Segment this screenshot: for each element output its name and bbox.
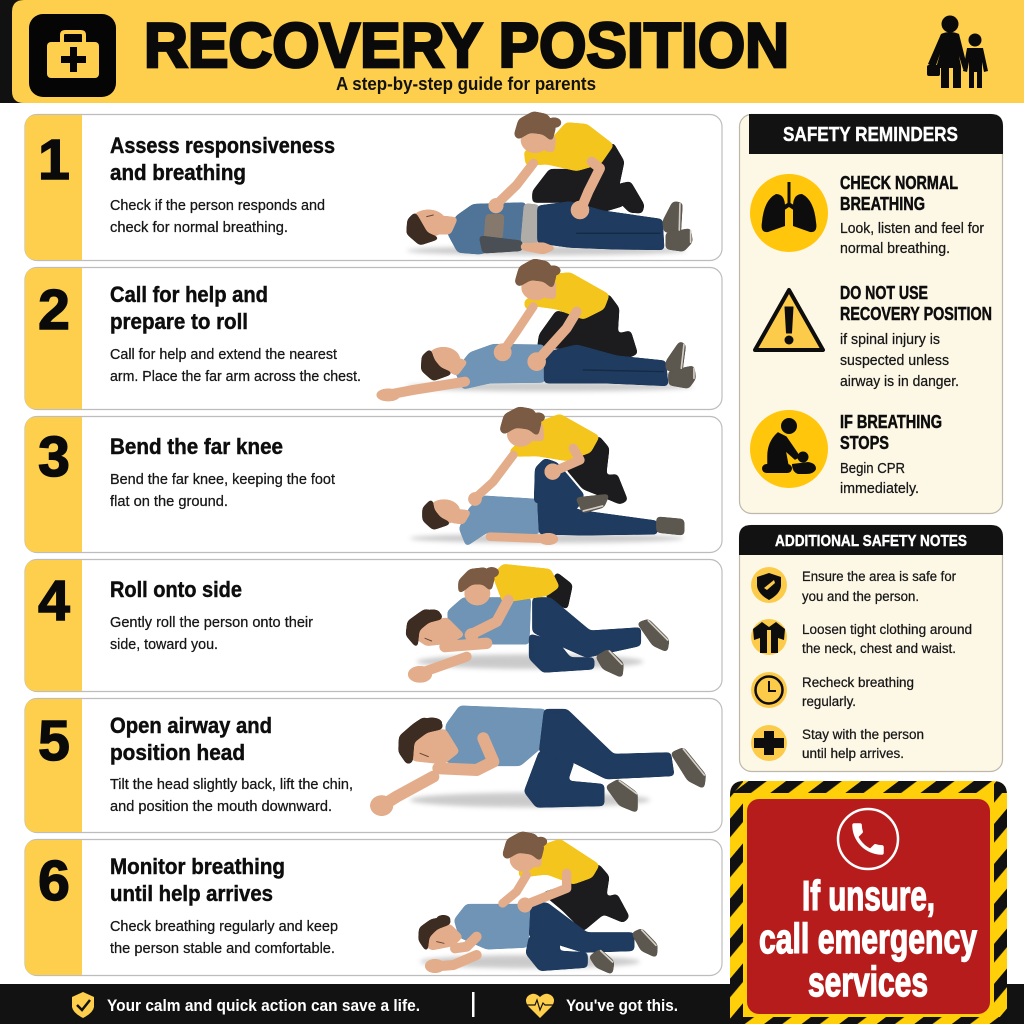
panel: step 3: Bend the far knee, keeping the foot <box>110 472 335 488</box>
text: check normal breathing: CHECK NORMAL <box>840 173 958 193</box>
panel: step 1 <box>25 112 722 260</box>
panel: step 2: Call for help and <box>110 282 268 307</box>
panel: step 1: check for normal breathing. <box>110 220 288 236</box>
panel: step 1: and breathing <box>110 160 246 185</box>
callout text <box>759 872 977 1005</box>
note: stay with person: Stay with the person <box>802 727 924 742</box>
illustration: monitoring breathing <box>419 832 657 973</box>
callout: call emergency services <box>730 781 1007 1024</box>
panel: step 5 <box>25 698 722 832</box>
note: area safe: Ensure the area is safe for <box>802 569 956 584</box>
subtitle: A step-by-step guide for parents <box>336 74 596 94</box>
icon: parent and child <box>927 16 988 88</box>
icon: CPR <box>750 410 828 488</box>
text: do not use recovery position: DO NOT USE <box>840 283 928 303</box>
panel: step 2: 2 <box>38 278 70 342</box>
heading: additional safety notes: ADDITIONAL SAFETY NOTES <box>775 533 967 550</box>
panel: step 2: arm. Place the far arm across the chest. <box>110 369 361 385</box>
note: recheck breathing: regularly. <box>802 694 856 709</box>
text: do not use recovery position: if spinal injury is <box>840 332 940 348</box>
heading: additional safety notes <box>739 525 1003 555</box>
icon: heart with pulse <box>526 994 554 1018</box>
heading: safety reminders: SAFETY REMINDERS <box>783 124 958 146</box>
illustration: helper checking person lying on back <box>407 112 692 255</box>
text: do not use recovery position <box>840 283 992 390</box>
text: check normal breathing: BREATHING <box>840 194 925 214</box>
panel: step 2: prepare to roll <box>110 309 248 334</box>
text: if breathing stops: Begin CPR <box>840 461 905 477</box>
note: area safe: you and the person. <box>802 589 919 604</box>
footer reassurance: You've got this. <box>566 996 678 1015</box>
footer message: Your calm and quick action can save a life. <box>107 996 420 1015</box>
note: recheck breathing: Recheck breathing <box>802 675 914 690</box>
panel: step 5: Open airway and <box>110 713 272 738</box>
panel: step 3: Bend the far knee <box>110 434 283 459</box>
panel: step 2 <box>25 260 722 410</box>
text: check normal breathing: Look, listen and feel for <box>840 221 984 237</box>
panel: step 1: 1 <box>38 128 70 192</box>
panel: step 1: Check if the person responds and <box>110 198 325 214</box>
panel: additional safety notes <box>739 525 1003 772</box>
icon: shield check <box>72 992 94 1018</box>
panel: safety reminders <box>740 114 1003 514</box>
panel: step 1: Assess responsiveness <box>110 133 335 158</box>
note: loosen clothing: Loosen tight clothing around <box>802 622 972 637</box>
icon: lungs <box>750 174 828 252</box>
panel: step 6: Check breathing regularly and keep <box>110 919 338 935</box>
note: stay with person: until help arrives. <box>802 746 904 761</box>
note: area safe <box>751 567 956 604</box>
panel: step 6: until help arrives <box>110 881 273 906</box>
illustration: bending far knee <box>410 408 683 545</box>
text: check normal breathing <box>840 173 984 257</box>
icon: warning triangle <box>755 290 823 350</box>
title: RECOVERY POSITION <box>144 11 789 81</box>
panel: step 6: 6 <box>38 849 70 913</box>
panel: step 6: Monitor breathing <box>110 854 285 879</box>
panel: step 3: 3 <box>38 425 70 489</box>
panel: step 3 <box>25 408 722 552</box>
panel: step 2: Call for help and extend the nearest <box>110 347 337 363</box>
callout text: If unsure, <box>802 872 935 919</box>
panel: step 4: Gently roll the person onto their <box>110 615 313 631</box>
text: do not use recovery position: suspected unless <box>840 353 949 369</box>
icon: phone <box>838 809 898 869</box>
panel: step 4: Roll onto side <box>110 577 242 602</box>
panel: step 6: the person stable and comfortable. <box>110 941 335 957</box>
footer bar <box>0 984 1024 1024</box>
icon: first aid kit <box>29 14 116 97</box>
header banner <box>0 0 1024 103</box>
panel: step 4: side, toward you. <box>110 637 218 653</box>
panel: step 4 <box>25 560 722 692</box>
text: if breathing stops <box>840 412 942 497</box>
panel: step 5: and position the mouth downward. <box>110 799 332 815</box>
illustration: person on side with airway open <box>371 707 705 815</box>
text: do not use recovery position: airway is in danger. <box>840 374 959 390</box>
panel: step 5: position head <box>110 740 245 765</box>
text: if breathing stops: STOPS <box>840 433 889 453</box>
note: recheck breathing <box>751 672 914 709</box>
panel: step 5: 5 <box>38 709 70 773</box>
note: stay with person <box>751 725 924 761</box>
text: if breathing stops: IF BREATHING <box>840 412 942 432</box>
illustration: rolling person onto side <box>407 565 668 682</box>
panel: step 3: flat on the ground. <box>110 494 228 510</box>
note: loosen clothing: the neck, chest and waist. <box>802 641 956 656</box>
text: if breathing stops: immediately. <box>840 481 919 497</box>
illustration: helper preparing to roll person <box>377 260 695 400</box>
panel: step 4: 4 <box>38 569 70 633</box>
panel: step 6 <box>25 832 722 976</box>
panel: step 5: Tilt the head slightly back, lift the chin, <box>110 777 353 793</box>
callout text: services <box>808 958 928 1005</box>
text: check normal breathing: normal breathing. <box>840 241 950 257</box>
note: loosen clothing <box>751 619 972 656</box>
heading: safety reminders <box>749 114 1003 154</box>
